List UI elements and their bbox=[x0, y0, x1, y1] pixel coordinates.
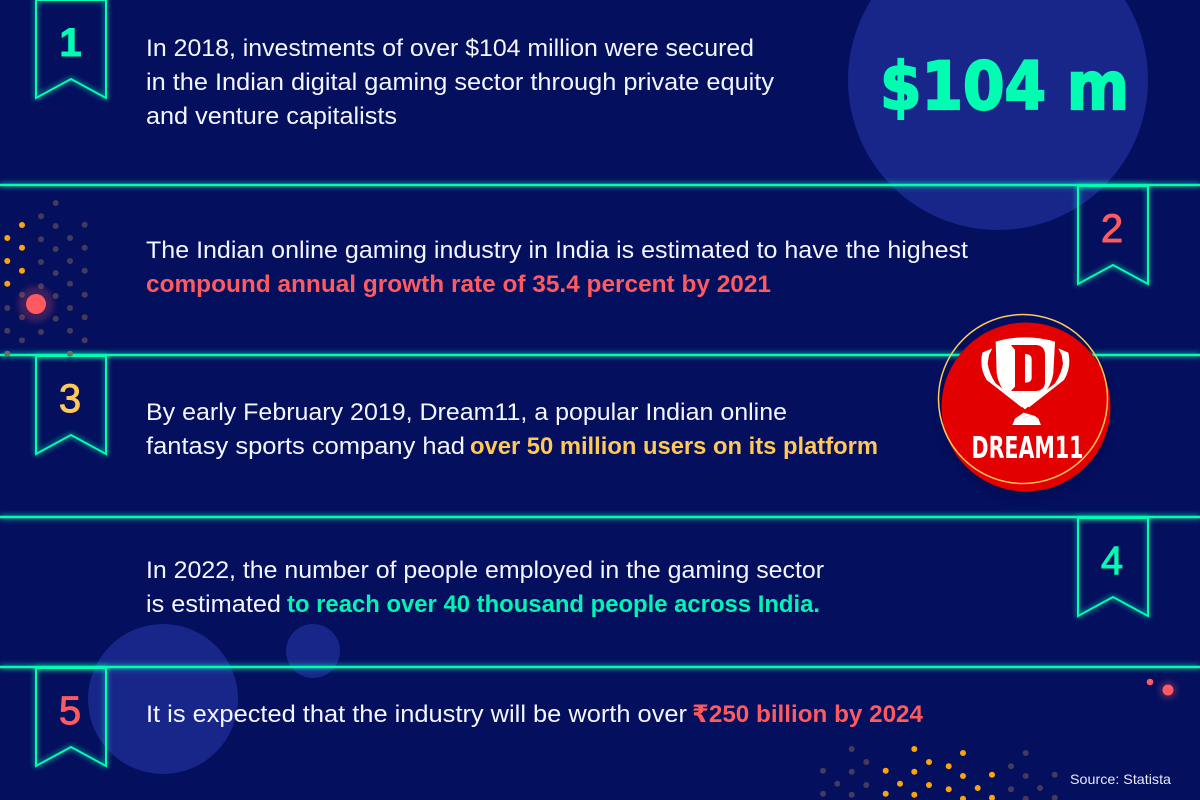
text 4: is estimated bbox=[146, 591, 281, 618]
dot pattern bottom bbox=[820, 746, 1058, 800]
dots overlapping divider bbox=[4, 351, 73, 357]
glowing red dot left bbox=[18, 286, 54, 322]
decorative small circle bottom left bbox=[286, 624, 340, 678]
ribbon 4 bbox=[1078, 518, 1148, 616]
text 5: It is expected that the industry will be worth over bbox=[146, 701, 687, 728]
text 5: ₹250 billion by 2024 bbox=[692, 701, 924, 728]
divider lines bbox=[0, 185, 1200, 667]
item 1 bbox=[36, 0, 774, 130]
logo ring bbox=[938, 314, 1108, 484]
logo disc bbox=[942, 322, 1110, 492]
DREAM11 wordmark: DREAM11 bbox=[972, 431, 1084, 466]
ribbon 5 bbox=[36, 668, 106, 766]
item 2 bbox=[146, 186, 1148, 298]
text 3: By early February 2019, Dream11, a popular Indian online bbox=[146, 399, 787, 426]
number 1: 1 bbox=[59, 21, 82, 65]
item 3 bbox=[36, 356, 878, 460]
text 3 bbox=[146, 399, 878, 460]
text 5 bbox=[146, 701, 924, 728]
number 5: 5 bbox=[59, 689, 81, 733]
number 2: 2 bbox=[1101, 207, 1123, 251]
item 5 bbox=[36, 668, 924, 766]
source note: Source: Statista bbox=[1070, 771, 1171, 787]
text 3: over 50 million users on its platform bbox=[470, 433, 878, 460]
decorative circle behind $104 m bbox=[848, 0, 1148, 230]
red dots bottom right bbox=[1147, 679, 1177, 699]
text 1: in the Indian digital gaming sector through private equity bbox=[146, 69, 774, 96]
text 2: The Indian online gaming industry in India is estimated to have the highest bbox=[146, 237, 968, 264]
logo shadow bbox=[942, 328, 1110, 496]
Dream11 logo bbox=[938, 314, 1110, 496]
text 4 bbox=[146, 557, 824, 618]
text 3: fantasy sports company had bbox=[146, 433, 465, 460]
decorative large circle bottom left bbox=[88, 624, 238, 774]
text 1: In 2018, investments of over $104 million were secured bbox=[146, 35, 754, 62]
text 1 bbox=[146, 35, 774, 130]
big figure $104 m: $104 m bbox=[880, 48, 1129, 125]
ribbon 3 bbox=[36, 356, 106, 454]
number 4: 4 bbox=[1101, 539, 1123, 583]
text 1: and venture capitalists bbox=[146, 103, 397, 130]
ribbon 1 bbox=[36, 0, 106, 98]
text 4: to reach over 40 thousand people across India. bbox=[287, 591, 820, 618]
dot pattern left bbox=[4, 200, 88, 343]
text 2 bbox=[146, 237, 968, 298]
ribbon 2 bbox=[1078, 186, 1148, 284]
item 4 bbox=[146, 518, 1148, 618]
text 4: In 2022, the number of people employed in the gaming sector bbox=[146, 557, 824, 584]
number 3: 3 bbox=[59, 377, 81, 421]
trophy icon bbox=[981, 337, 1069, 425]
text 2: compound annual growth rate of 35.4 percent by 2021 bbox=[146, 271, 771, 298]
